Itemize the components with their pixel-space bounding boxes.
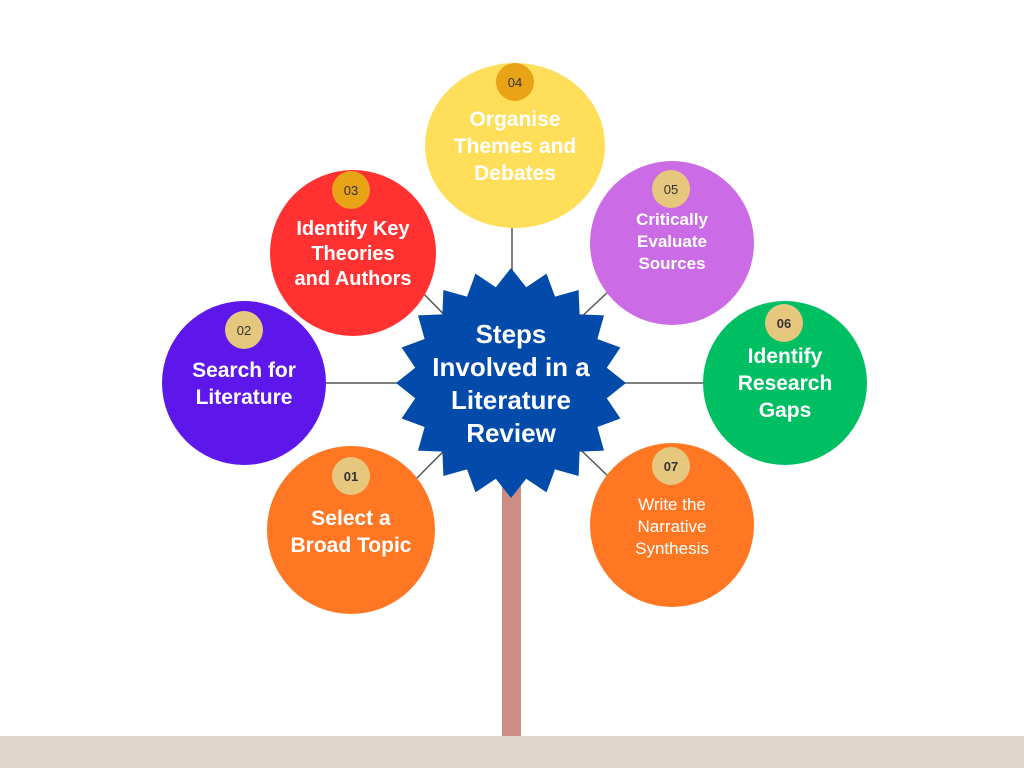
center star title: Involved in a bbox=[432, 352, 590, 382]
circle 02: 02 bbox=[237, 323, 251, 338]
circle 04: Themes and bbox=[454, 135, 576, 158]
circle 03: Identify Key bbox=[296, 218, 411, 240]
circle 01: 01 bbox=[344, 469, 358, 484]
circle 03: Theories bbox=[311, 243, 395, 265]
circle 01: Select a bbox=[311, 507, 391, 530]
circle 05: 05 bbox=[664, 182, 678, 197]
circle 01 bbox=[267, 446, 435, 614]
circle 02: Search for bbox=[192, 359, 296, 382]
circle 05 bbox=[590, 161, 754, 325]
circle 02 bbox=[162, 301, 326, 465]
circle 04: Organise bbox=[469, 108, 561, 131]
circle 03: and Authors bbox=[294, 268, 412, 290]
center star title bbox=[396, 268, 626, 498]
circle 07: Write the bbox=[638, 495, 706, 514]
center star title: Steps bbox=[476, 319, 546, 349]
center star title: Review bbox=[466, 418, 557, 448]
circle 07 bbox=[590, 443, 754, 607]
center star title: Literature bbox=[451, 385, 571, 415]
circle 05: Sources bbox=[638, 254, 706, 273]
circle 03: 03 bbox=[344, 183, 358, 198]
circle 06: Gaps bbox=[759, 399, 811, 422]
circle 05: Evaluate bbox=[637, 232, 707, 251]
circle 07: Synthesis bbox=[635, 539, 709, 558]
circle 06: Research bbox=[738, 372, 832, 395]
trunk bbox=[502, 470, 521, 736]
circle 04 bbox=[425, 63, 605, 228]
circle 01: Broad Topic bbox=[291, 534, 412, 557]
circle 05: Critically bbox=[636, 210, 708, 229]
ground bbox=[0, 736, 1024, 768]
circle 06 bbox=[703, 301, 867, 465]
circle 02: Literature bbox=[196, 386, 292, 409]
circle 06: 06 bbox=[777, 316, 791, 331]
circle 07: Narrative bbox=[638, 517, 706, 536]
connector lines bbox=[326, 228, 703, 480]
circle 06: Identify bbox=[748, 345, 823, 368]
circle 07: 07 bbox=[664, 459, 678, 474]
circle 04: Debates bbox=[474, 162, 556, 185]
circle 03 bbox=[270, 170, 436, 336]
circle 04: 04 bbox=[508, 75, 522, 90]
